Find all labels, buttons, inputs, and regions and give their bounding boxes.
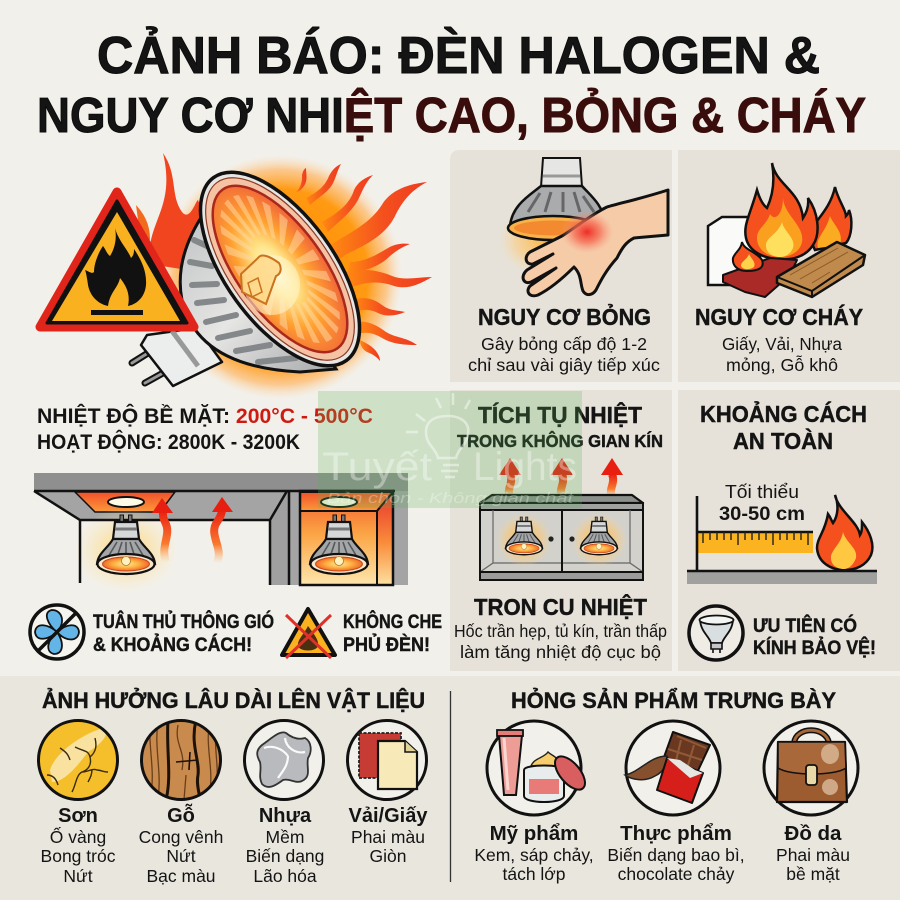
do not cover warning — [282, 609, 442, 658]
temperature text — [37, 404, 373, 454]
red fabric — [723, 258, 797, 297]
icon: chocolate — [625, 721, 720, 815]
label: plastic: Biến dạng — [246, 846, 324, 866]
big flame — [745, 163, 818, 259]
burn risk heading: NGUY CƠ BỎNG — [478, 302, 651, 330]
icon: flame — [817, 495, 872, 570]
panel background — [678, 150, 900, 382]
protective glass text — [753, 613, 876, 659]
ceiling soffit — [34, 491, 287, 520]
title line 2: NGUY CƠ NHIỆT CAO, BỎNG & CHÁY — [37, 88, 866, 143]
icon: warped wood — [142, 720, 220, 800]
panel: burn risk — [450, 150, 672, 382]
ventilation text: & KHOẢNG CÁCH! — [93, 633, 252, 656]
burn mark — [561, 211, 613, 253]
label: plastic — [246, 805, 324, 886]
icon: leather bag — [764, 721, 858, 815]
hand — [523, 190, 668, 296]
label: cosmetics: Kem, sáp chảy, — [474, 845, 594, 865]
panel background — [450, 150, 672, 382]
panel: fire risk — [678, 150, 900, 382]
ventilation warning — [30, 605, 274, 659]
ventilation text: TUÂN THỦ THÔNG GIÓ — [93, 609, 274, 633]
panel background — [450, 390, 672, 671]
burn risk description: Gây bỏng cấp độ 1-2 — [481, 334, 647, 354]
icon: crossed warning triangle — [282, 609, 335, 658]
safe distance heading: AN TOÀN — [733, 427, 833, 454]
label: wood: Cong vênh — [139, 827, 223, 847]
thermal mix description: làm tăng nhiệt độ cục bộ — [460, 642, 661, 662]
burn risk description: chỉ sau vài giây tiếp xúc — [468, 355, 660, 375]
paper sheet — [708, 217, 760, 285]
minimum distance label — [719, 481, 805, 525]
icon: no fan — [30, 605, 84, 659]
ventilation text — [93, 609, 274, 656]
products heading: HỎNG SẢN PHẨM TRƯNG BÀY — [511, 688, 836, 713]
burn risk description — [468, 334, 660, 375]
halogen capsule — [241, 255, 300, 315]
icon: burning materials — [708, 163, 865, 297]
watermark name: Tuyết — [322, 445, 432, 489]
heat arrow 1 — [152, 498, 173, 562]
label: fabric and paper: Phai màu — [351, 827, 425, 847]
label: wood: Gỗ — [167, 803, 195, 827]
fire risk description: Giấy, Vải, Nhựa — [722, 334, 842, 354]
label: cosmetics: tách lớp — [502, 864, 566, 884]
watermark slogan: Bản chọn - Không gian chất — [327, 490, 574, 507]
thermal mix description — [454, 621, 667, 662]
label: food — [607, 822, 745, 884]
enclosed cavity — [300, 491, 394, 585]
label: fabric and paper — [349, 805, 428, 866]
watermark: Tuyết Lights — [318, 391, 582, 508]
right wall — [270, 491, 289, 585]
right flame — [808, 187, 851, 250]
heat arrows — [499, 458, 623, 497]
label: paint: Sơn — [58, 805, 98, 827]
label: wood — [139, 803, 223, 886]
fire risk description — [722, 334, 842, 375]
label: leather: bề mặt — [786, 864, 840, 884]
do not cover text — [343, 609, 442, 656]
cabinet lamps — [505, 517, 543, 555]
vertical section divider — [450, 691, 452, 882]
black flame symbol — [85, 228, 146, 306]
label: paint: Ố vàng — [50, 826, 106, 847]
label: paint: Bong tróc — [41, 846, 116, 866]
title — [37, 26, 866, 143]
label: leather — [776, 822, 850, 884]
open lamp glow — [74, 508, 178, 592]
fire risk heading: NGUY CƠ CHÁY — [695, 303, 863, 330]
wood plank — [777, 242, 865, 297]
do not cover text: PHỦ ĐÈN! — [343, 632, 430, 656]
panel background — [678, 390, 900, 671]
label: food: chocolate chảy — [618, 864, 735, 884]
watermark brand: Lights — [473, 445, 577, 489]
label: food: Biến dạng bao bì, — [607, 845, 745, 865]
panel: safe distance — [678, 390, 900, 671]
heat build-up subheading: TRONG KHÔNG GIAN KÍN — [457, 430, 663, 451]
reflector ribs — [190, 240, 296, 362]
label: wood: Nứt — [166, 846, 196, 866]
watermark bulb — [406, 393, 470, 477]
label: plastic: Nhựa — [259, 805, 312, 827]
heat arrow 2 — [212, 497, 233, 563]
small flame — [733, 242, 763, 271]
icon: melted plastic — [244, 720, 324, 800]
icon: fabric and paper — [348, 720, 426, 800]
minimum distance label: Tối thiểu — [725, 481, 799, 502]
operating colour temperature: HOẠT ĐỘNG: 2800K - 3200K — [37, 430, 300, 454]
protective glass text: ƯU TIÊN CÓ — [753, 613, 857, 637]
lamp front rim — [170, 146, 390, 392]
protective glass text: KÍNH BẢO VỆ! — [753, 635, 876, 659]
panel: heat build-up — [450, 390, 672, 671]
heat build-up heading: TÍCH TỤ NHIỆT — [478, 401, 643, 428]
recessed ceiling diagram — [34, 473, 408, 592]
icon: glass lamp — [689, 606, 743, 660]
label: fabric and paper: Vải/Giấy — [349, 805, 428, 827]
label: leather: Đồ da — [785, 822, 842, 845]
heat flames — [136, 153, 432, 361]
ceiling slab — [34, 473, 408, 491]
label: paint — [41, 805, 116, 886]
section: materials — [38, 688, 428, 886]
lamp base and pins — [132, 328, 222, 386]
label: fabric and paper: Giòn — [370, 846, 406, 866]
label: plastic: Lão hóa — [253, 866, 317, 886]
recess light — [108, 497, 144, 507]
fire risk description: mỏng, Gỗ khô — [726, 354, 838, 375]
thermal mix heading: TRON CU NHIỆT — [474, 593, 648, 620]
label: leather: Phai màu — [776, 845, 850, 865]
section: display products — [474, 688, 858, 884]
safe distance heading — [700, 399, 867, 454]
glass cabinet — [480, 495, 643, 580]
label: cosmetics — [474, 822, 594, 884]
surface temperature: NHIỆT ĐỘ BỀ MẶT: 200°C - 500°C — [37, 404, 373, 428]
materials heading: ẢNH HƯỞNG LÂU DÀI LÊN VẬT LIỆU — [42, 688, 425, 713]
lamp in enclosed cavity — [310, 515, 368, 574]
icon: cracked paint — [38, 720, 118, 800]
safe distance heading: KHOẢNG CÁCH — [700, 399, 867, 427]
heat glow — [158, 155, 402, 399]
heated recess — [75, 492, 175, 512]
lamp reflector body — [180, 213, 336, 372]
label: wood: Bạc màu — [146, 866, 216, 886]
thermal mix description: Hốc trần hẹp, tủ kín, trần thấp — [454, 621, 667, 641]
panel: long-term effects band — [0, 676, 900, 900]
ceiling outlines — [34, 491, 395, 585]
minimum distance label: 30-50 cm — [719, 503, 805, 525]
title line 1: CẢNH BÁO: ĐÈN HALOGEN & — [97, 26, 820, 85]
icon: lamp over hand — [499, 158, 668, 296]
flammable warning triangle — [40, 192, 194, 327]
lamp in open ceiling — [97, 515, 155, 574]
ruler diagram — [687, 496, 877, 584]
panel: lamp hero illustration — [40, 146, 432, 399]
label: plastic: Mềm — [266, 827, 304, 847]
icon: cosmetics — [487, 721, 591, 815]
label: cosmetics: Mỹ phẩm — [490, 822, 578, 845]
do not cover text: KHÔNG CHE — [343, 609, 442, 633]
label: paint: Nứt — [63, 866, 93, 886]
label: food: Thực phẩm — [620, 822, 732, 845]
